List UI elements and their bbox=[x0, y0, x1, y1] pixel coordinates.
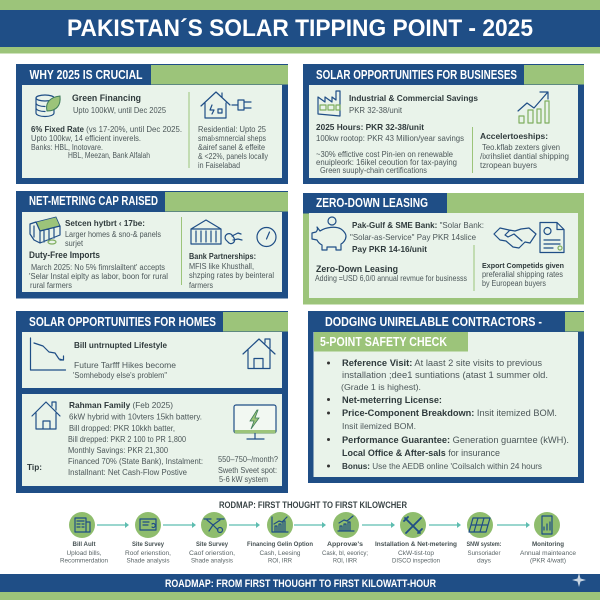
text: export: Export Competids given bbox=[482, 261, 564, 270]
checklist: (Grade 1 is highest). bbox=[341, 382, 421, 392]
panel: solar opportunities for homes: Financed 70% (State Bank), Instalment: bbox=[68, 457, 203, 466]
step: drone survey: Caof orierstion, bbox=[189, 550, 235, 557]
panel: why 2025 is crucial: Upto 100kw, 14 efficient inverels. bbox=[31, 134, 141, 143]
checklist: Net-meterring License: bbox=[342, 395, 442, 405]
title banner: PAKISTAN´S SOLAR TIPPING POINT - 2025 bbox=[67, 15, 533, 42]
step: bill audit: Upload bills, bbox=[66, 550, 102, 557]
panel: net-metering cap raised: MFIS like Khusthall, bbox=[189, 262, 254, 271]
checklist bbox=[327, 358, 569, 471]
text: bank partnerships: Bank Partnerships: bbox=[189, 252, 256, 261]
checklist: Insit ilemized BOM. bbox=[342, 421, 416, 431]
icon: solar container bbox=[30, 217, 60, 244]
step: site survey bbox=[125, 512, 171, 564]
text: industrial savings: Industrial & Commercial Savings bbox=[349, 93, 478, 103]
text: green financing: Green Financing bbox=[72, 93, 141, 103]
panel: solar opportunities for businesses: /ixrihsliet dantial shipping bbox=[480, 152, 569, 161]
panel: why 2025 is crucial: HBL, Meezan, Bank Alfalah bbox=[68, 151, 150, 160]
text: residential: Residential: Upto 25 bbox=[198, 125, 267, 134]
step: approvals: Approvæ's bbox=[327, 541, 363, 548]
panel: solar opportunities for businesses: 100kw rootop: PKR 43 Million/year savings bbox=[316, 134, 464, 143]
step: monitoring: Monitoring bbox=[532, 541, 564, 548]
checklist: Performance Guarantee: Generation guarntee (kWH). bbox=[342, 435, 569, 445]
heading: net-metering: NET-METRING CAP RAISED bbox=[29, 194, 158, 208]
panel: solar opportunities for homes: Bill drepped: PKR 2 100 to PR 1,800 bbox=[68, 435, 187, 444]
panel: why 2025 is crucial: Upto 100kW, until Dec 2025 bbox=[73, 106, 167, 115]
panel: zero-down leasing: preferalial shipping rates bbox=[482, 270, 563, 279]
icon: link bbox=[225, 233, 242, 244]
panel: net-metering cap raised: March 2025: No 5% fimrslailtent' accepts bbox=[31, 263, 165, 272]
icon: rising bar chart bbox=[518, 92, 549, 123]
heading: businesses: SOLAR OPPORTUNITIES FOR BUSINESES bbox=[316, 68, 517, 82]
arrow bbox=[294, 522, 326, 528]
checklist: installation ;dee1 suntiations (atast 1 summer old. bbox=[342, 370, 548, 380]
heading: homes: SOLAR OPPORTUNITIES FOR HOMES bbox=[29, 315, 216, 329]
panel: solar opportunities for homes: Future Tarfff Hikes become bbox=[74, 360, 176, 370]
icon: house with plug bbox=[201, 92, 251, 118]
checklist: Bonus: Use the AEDB online 'Coilsalch within 24 hours bbox=[342, 461, 542, 471]
step: installation: DISCO inspection bbox=[392, 558, 440, 564]
panel: zero-down leasing: Pay PKR 14-16/unit bbox=[352, 244, 427, 254]
panel: net-metering cap raised bbox=[16, 191, 288, 298]
footer banner: ROADMAP: FROM FIRST THOUGHT TO FIRST KILOWATT-HOUR bbox=[165, 578, 436, 590]
panel: solar opportunities for businesses: tzropean buyers bbox=[480, 161, 537, 170]
step: installation: CkW-tist-top bbox=[398, 550, 434, 557]
arrow bbox=[97, 522, 129, 528]
panel: net-metering cap raised: farmers bbox=[189, 281, 213, 290]
step: approvals: ROI, IIRR bbox=[333, 558, 357, 564]
heading: why 2025 is crucial: WHY 2025 IS CRUCIAL bbox=[30, 68, 143, 82]
step: system bbox=[466, 512, 502, 564]
step: monitoring: (PKR 4/watt) bbox=[530, 558, 566, 564]
icon: house small bbox=[32, 402, 60, 429]
panel: zero-down leasing bbox=[303, 193, 584, 304]
icon: sparkle bbox=[572, 573, 586, 587]
text: zero-down leasing: Zero-Down Leasing bbox=[316, 264, 398, 275]
icon: factory bbox=[318, 91, 340, 116]
text: 2025 hours: 2025 Hours: PKR 32-38/unit bbox=[316, 122, 424, 132]
text: larger homes: Setcen hytbrt ‹ 17be: bbox=[65, 219, 145, 228]
text: accelerators: Accelertoeships: bbox=[480, 131, 548, 141]
text: rahman family: Rahman Family (Feb 2025) bbox=[69, 400, 173, 410]
arrow bbox=[163, 522, 196, 528]
step: site survey: Shade analysis bbox=[126, 558, 170, 564]
step: site survey: Roof erienstion, bbox=[125, 550, 171, 557]
heading: dodging: DODGING UNIRELABLE CONTRACTORS - bbox=[325, 315, 542, 329]
step: installation bbox=[375, 512, 457, 564]
panel: solar opportunities for businesses: PKR 32-38/unit bbox=[349, 106, 403, 115]
panel: solar opportunities for homes: 5-6 kW system bbox=[219, 475, 268, 484]
panel: why 2025 is crucial: smal›smnercial sheps bbox=[198, 134, 266, 143]
panel: solar opportunities for businesses: enuipleork: 16ikel ceoution for tax-paying bbox=[316, 158, 457, 167]
checklist: Reference Visit: At laast 2 site visits to previous bbox=[342, 358, 543, 368]
step: installation: Installation & Net-metering bbox=[375, 541, 457, 548]
roadmap steps bbox=[60, 512, 576, 564]
panel: solar opportunities for homes: Sweth Sveet spot: bbox=[218, 466, 277, 475]
icon: handshake bbox=[494, 228, 536, 248]
step: system: days bbox=[477, 558, 492, 564]
icon: monitor with bolt bbox=[234, 405, 276, 439]
step: bill audit bbox=[60, 512, 108, 564]
text: lifestyle: Bill untrnupted Lifestyle bbox=[74, 340, 167, 350]
panel: why 2025 is crucial bbox=[16, 64, 288, 184]
step: monitoring: Annual mainteance bbox=[520, 550, 576, 557]
heading: roadmap: RODMAP: FIRST THOUGHT TO FIRST KILOWCHER bbox=[219, 500, 407, 511]
icon: bank bbox=[191, 220, 221, 244]
panel: why 2025 is crucial: Banks: HBL, Inotovare. bbox=[31, 143, 103, 152]
panel: zero-down leasing: Adding =USD 6,0/0 annual revmue for businesss bbox=[315, 274, 467, 283]
icon: house bbox=[243, 339, 275, 368]
panel: why 2025 is crucial: in Faiselabad bbox=[198, 161, 240, 170]
panel: net-metering cap raised: rural farmers bbox=[30, 281, 72, 290]
panel: solar opportunities for homes bbox=[16, 311, 288, 493]
icon: piggy bank bbox=[312, 217, 346, 250]
panel: solar opportunities for homes: 'Somhebody else's problem" bbox=[73, 371, 167, 380]
step: drone survey: Site Survey bbox=[196, 541, 228, 548]
panel: net-metering cap raised: shzping rates by beinteral bbox=[189, 271, 274, 280]
step: system: SNW system: bbox=[466, 541, 502, 548]
step: drone survey bbox=[189, 512, 235, 564]
step: site survey: Site Survey bbox=[132, 541, 164, 548]
panel: solar opportunities for homes: Monthly Savings: PKR 21,300 bbox=[68, 446, 169, 455]
step: financing: Cash, Leesing bbox=[260, 550, 301, 557]
checklist: Local Office & After-sals for insurance bbox=[342, 448, 500, 458]
text: duty-free imports: Duty-Free Imports bbox=[29, 250, 100, 260]
panel: solar opportunities for businesses bbox=[303, 64, 584, 184]
step: system: Sunsoriader bbox=[468, 550, 501, 557]
text: fixed rate: 6% Fixed Rate (vs 17-20%, until Dec 2025. bbox=[31, 125, 182, 134]
panel: dodging unreliable contractors bbox=[308, 311, 584, 483]
panel: net-metering cap raised: surjet bbox=[65, 239, 84, 248]
arrow bbox=[362, 522, 395, 528]
step: monitoring bbox=[520, 512, 576, 564]
icon: contract bbox=[540, 222, 564, 252]
panel: why 2025 is crucial: & <22%, panels locally bbox=[198, 152, 268, 161]
step: approvals: Cask, bl, eeoricy; bbox=[322, 550, 368, 557]
title banner bbox=[0, 0, 600, 54]
panel: solar opportunities for businesses: Green suuply-chain certifications bbox=[320, 166, 427, 175]
panel: solar opportunities for homes: Installnant: Net Cash-Flow Postive bbox=[68, 468, 188, 477]
panel: solar opportunities for businesses: Teo.kflab zexters given bbox=[482, 143, 560, 152]
step: approvals bbox=[322, 512, 368, 564]
arrow bbox=[497, 522, 530, 528]
icon: falling chart bbox=[30, 338, 66, 370]
footer banner bbox=[0, 573, 600, 600]
heading: zero-down: ZERO-DOWN LEASING bbox=[316, 196, 428, 210]
panel: solar opportunities for homes: 6kW hybrid with 10vters 15kh battery. bbox=[69, 412, 202, 422]
panel: solar opportunities for businesses: ~30% effictive cost Pin-ien on renewable bbox=[316, 150, 454, 159]
step: bill audit: Bill Ault bbox=[72, 541, 96, 548]
heading: safety check: 5-POINT SAFETY CHECK bbox=[320, 335, 447, 349]
panel: zero-down leasing: by European buyers bbox=[482, 279, 546, 288]
panel: net-metering cap raised: 'Selar Instal eiplty as labor, boon for rural bbox=[29, 272, 168, 281]
checklist: Price-Component Breakdown: Insit itemized BOM. bbox=[342, 408, 557, 418]
text: solar as service: Pak-Gulf & SME Bank: "Solar Bank: bbox=[352, 220, 484, 230]
step: financing: Financing Gelin Option bbox=[247, 541, 313, 548]
text: tip: Tip: bbox=[27, 462, 42, 472]
panel: net-metering cap raised: Larger homes & sno-& panels bbox=[65, 230, 161, 239]
step: bill audit: Recommerdation bbox=[60, 558, 108, 564]
step: drone survey: Shade analysis bbox=[191, 558, 234, 564]
panel: zero-down leasing: "Solar-as-Service" Pay PKR 14slice bbox=[350, 232, 476, 242]
icon: coins and leaf bbox=[36, 95, 60, 116]
panel: solar opportunities for homes: Bill dropped: PKR 10kkh batter, bbox=[69, 424, 175, 433]
step: financing bbox=[247, 512, 313, 564]
arrow bbox=[429, 522, 461, 528]
step: financing: ROI, IRR bbox=[268, 558, 292, 564]
arrow bbox=[229, 522, 260, 528]
panel: why 2025 is crucial: &airef sanel & effeite bbox=[198, 143, 265, 152]
icon: clock bbox=[257, 228, 276, 246]
text: sweet spot: 550–750–/month? bbox=[218, 455, 279, 464]
